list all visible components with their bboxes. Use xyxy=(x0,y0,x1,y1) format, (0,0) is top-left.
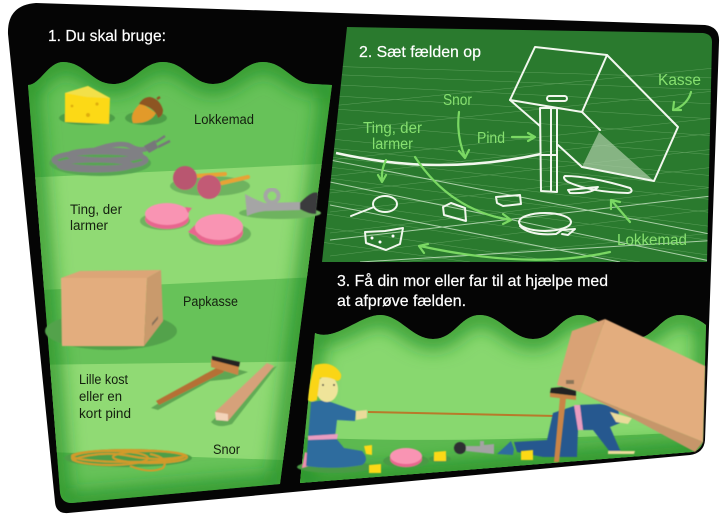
label: papkasse: Papkasse xyxy=(183,294,238,309)
panel 3 title: 3. Få din mor eller far til at hjælpe med xyxy=(337,272,608,290)
panel 3 title: at afprøve fælden. xyxy=(337,293,466,310)
callout: ting der larmer xyxy=(363,120,610,260)
blueprint background xyxy=(322,27,712,262)
label: ting der larmer xyxy=(70,202,122,233)
icon: small broom xyxy=(151,356,248,410)
label: snor: Snor xyxy=(213,442,240,457)
panel 2: saet faelden op xyxy=(320,27,720,262)
icon: cheese xyxy=(59,86,115,125)
support stick outline xyxy=(540,108,557,192)
label: ting der larmer: Ting, der xyxy=(70,202,122,217)
panel 3 green ground xyxy=(295,310,715,490)
label: ting der larmer: larmer xyxy=(70,218,108,233)
callout: pind: Pind xyxy=(477,130,505,147)
string line xyxy=(336,153,541,165)
icon: pink drums xyxy=(140,203,251,246)
callout: snor: Snor xyxy=(443,92,472,109)
callout: ting der larmer: Ting, der xyxy=(363,120,422,137)
label: lille kost eller en kort pind: kort pind xyxy=(79,406,131,421)
icon: short stick xyxy=(211,363,277,426)
trap box outline xyxy=(510,47,678,181)
label: lille kost eller en kort pind: Lille kost xyxy=(79,372,128,387)
panel 1 title: 1. Du skal bruge: xyxy=(48,28,166,45)
noise makers on floor xyxy=(383,441,494,468)
panel 1 green ground xyxy=(20,55,340,514)
callout: lokkemad xyxy=(611,200,687,249)
prop stick and brush xyxy=(550,387,576,462)
icon: maracas xyxy=(170,166,250,199)
label: lokkemad: Lokkemad xyxy=(194,112,254,127)
callout: kasse xyxy=(658,72,701,110)
tipped cardboard box xyxy=(557,319,705,452)
icon: horn xyxy=(239,190,321,219)
panel 2 title: 2. Sæt fælden op xyxy=(359,44,481,61)
panel 3: faa din mor eller far xyxy=(295,272,715,490)
icon: rope coil xyxy=(64,449,192,471)
icon: cardboard box xyxy=(45,270,177,350)
perspective grid xyxy=(320,66,720,262)
bait and noise sketches xyxy=(351,176,632,250)
panel 3 title xyxy=(337,272,608,310)
icon: cable with plug xyxy=(49,136,170,176)
panel 1: du skal bruge xyxy=(20,28,340,514)
icon: acorn xyxy=(125,97,167,125)
child pulling string xyxy=(297,364,373,473)
label: lille kost eller en kort pind xyxy=(79,372,131,421)
label: lille kost eller en kort pind: eller en xyxy=(79,389,122,404)
callout: pind xyxy=(477,130,535,147)
adult crawling under box xyxy=(497,404,635,457)
callout: lokkemad: Lokkemad xyxy=(617,232,687,249)
rope pulled by child xyxy=(368,412,557,416)
callout: kasse: Kasse xyxy=(658,72,701,89)
callout: ting der larmer: larmer xyxy=(372,136,413,153)
cheese bait on floor xyxy=(364,445,533,473)
callout: snor xyxy=(443,92,472,158)
